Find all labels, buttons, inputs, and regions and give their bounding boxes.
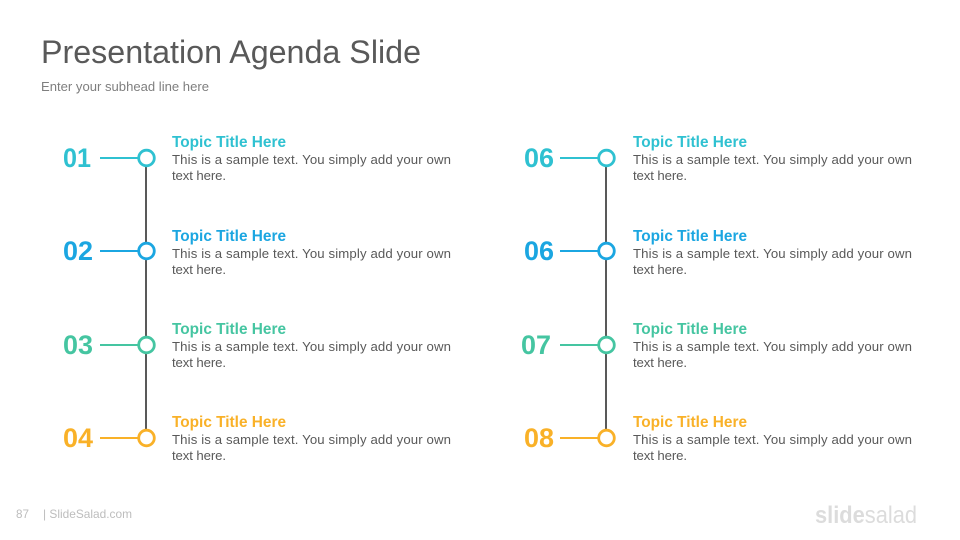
title: Presentation Agenda Slide — [41, 34, 421, 70]
item 03: text here. — [172, 355, 226, 370]
item 08 — [524, 414, 912, 463]
item 06 second: Topic Title Here — [633, 228, 747, 245]
item 06 second: text here. — [633, 262, 687, 277]
item 04 — [63, 414, 451, 463]
item 03: This is a sample text. You simply add your own — [172, 339, 451, 354]
item 06 second — [524, 228, 912, 277]
item 08: This is a sample text. You simply add your own — [633, 432, 912, 447]
item 06 top — [524, 134, 912, 183]
item 07: text here. — [633, 355, 687, 370]
item 08: Topic Title Here — [633, 414, 747, 431]
item 06 top: text here. — [633, 168, 687, 183]
item 02: Topic Title Here — [172, 228, 286, 245]
timeline spine right — [605, 158, 607, 438]
item 06 second: 06 — [524, 236, 554, 266]
item 03: 03 — [63, 330, 93, 360]
item 04: 04 — [63, 423, 93, 453]
item 04: Topic Title Here — [172, 414, 286, 431]
subhead: Enter your subhead line here — [41, 79, 209, 94]
item 06 top: Topic Title Here — [633, 134, 747, 151]
item 06 top: This is a sample text. You simply add your own — [633, 152, 912, 167]
item 01: Topic Title Here — [172, 134, 286, 151]
item 07: This is a sample text. You simply add your own — [633, 339, 912, 354]
item 07: 07 — [521, 330, 551, 360]
item 03: Topic Title Here — [172, 321, 286, 338]
item 01 — [63, 134, 451, 183]
item 08: text here. — [633, 448, 687, 463]
item 02 — [63, 228, 451, 277]
item 07 — [521, 321, 912, 370]
item 01: This is a sample text. You simply add your own — [172, 152, 451, 167]
item 02: 02 — [63, 236, 93, 266]
item 01: 01 — [63, 143, 91, 173]
item 02: text here. — [172, 262, 226, 277]
item 07: Topic Title Here — [633, 321, 747, 338]
item 04: This is a sample text. You simply add your own — [172, 432, 451, 447]
item 02: This is a sample text. You simply add your own — [172, 246, 451, 261]
logo: slidesalad wordmark: slidesalad — [815, 502, 917, 529]
item 04: text here. — [172, 448, 226, 463]
timeline spine left — [145, 158, 147, 438]
item 06 second: This is a sample text. You simply add your own — [633, 246, 912, 261]
item 03 — [63, 321, 451, 370]
item 06 top: 06 — [524, 143, 554, 173]
item 01: text here. — [172, 168, 226, 183]
item 08: 08 — [524, 423, 554, 453]
left timeline — [63, 134, 451, 463]
footer site name: | SlideSalad.com — [43, 507, 132, 521]
right timeline — [521, 134, 912, 463]
footer page number: 87 — [16, 507, 29, 521]
